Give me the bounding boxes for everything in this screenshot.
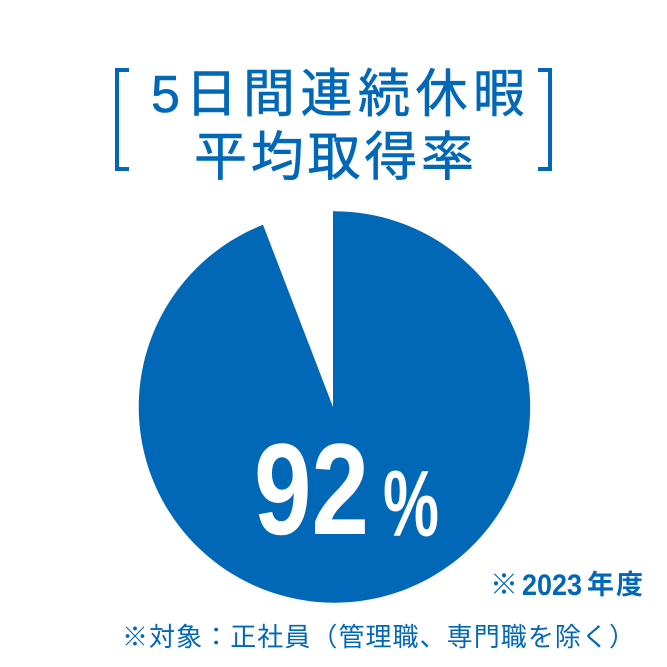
value label: 92 <box>254 416 369 562</box>
pie chart: 92% <box>139 211 530 603</box>
pie slice <box>139 211 530 603</box>
value label: % <box>383 451 439 556</box>
left bracket <box>117 70 129 169</box>
right bracket <box>538 70 550 169</box>
title line 2: 平均取得率 <box>194 128 474 187</box>
year note: 2023 <box>522 569 582 602</box>
year note: 年度 <box>587 570 643 600</box>
target note: ※対象：正社員（管理職、専門職を除く） <box>122 622 635 652</box>
year note <box>490 569 643 602</box>
title line 1: 5日間連続休暇 <box>151 66 525 124</box>
year note: ※ <box>490 569 518 600</box>
title <box>117 66 550 187</box>
